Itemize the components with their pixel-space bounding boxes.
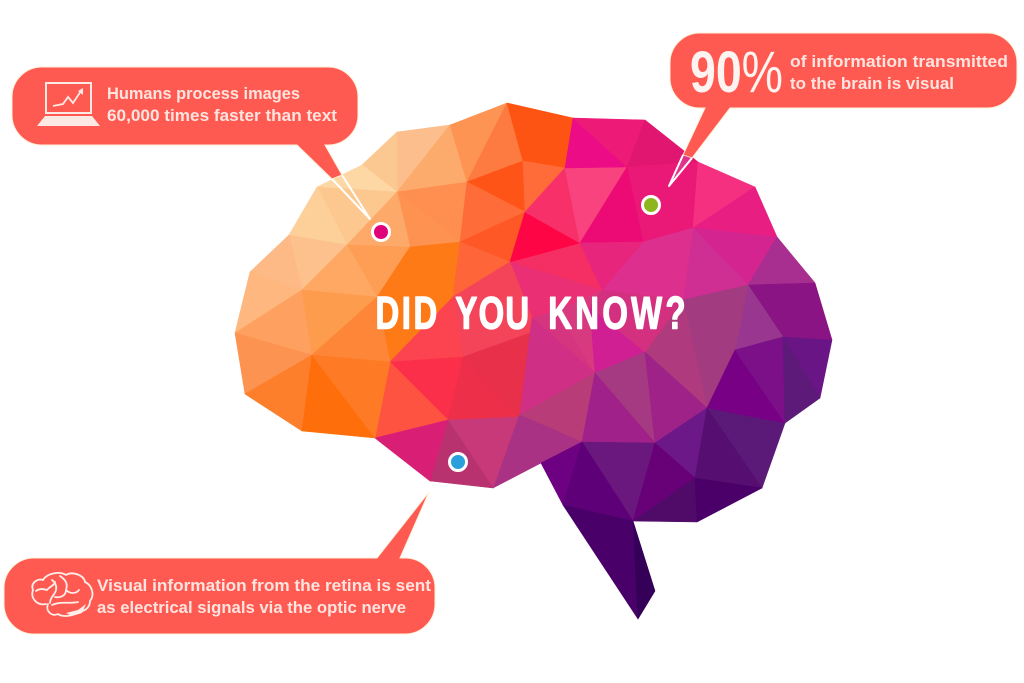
speech bubble [670,33,1017,158]
title: DID [376,288,440,339]
callout: optic nerve [4,492,435,634]
text [97,577,432,617]
pointer tip [332,175,370,219]
text [107,85,338,125]
text [790,53,1008,93]
text: Visual information from the retina is sent [97,577,432,595]
icon: brain outline [32,573,92,616]
callout: images vs text [12,67,370,219]
speech bubble [12,67,358,179]
marker: pink dot [372,224,390,240]
marker: green dot [642,196,660,214]
statistic: 90% [690,40,783,105]
callout: 90 percent visual [669,33,1017,186]
icon: laptop with chart [37,83,100,126]
title: KNOW? [548,288,689,339]
low-poly brain [235,103,832,619]
marker: blue dot [450,454,466,470]
text: Humans process images [107,85,300,103]
text: to the brain is visual [790,75,954,93]
pointer tip [669,155,692,186]
title: YOU [455,288,530,339]
text: as electrical signals via the optic nerve [97,599,406,617]
text: of information transmitted [790,53,1008,71]
text: 60,000 times faster than text [107,107,338,125]
speech bubble [4,492,435,634]
